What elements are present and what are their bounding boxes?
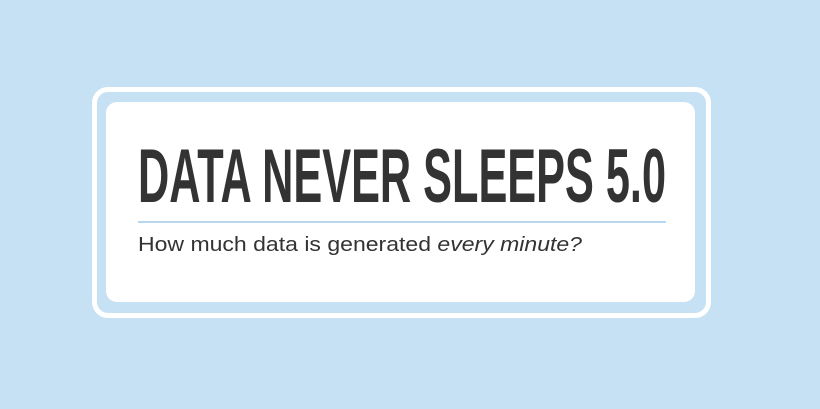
panel: title card xyxy=(106,102,695,302)
subtitle: How much data is generated every minute? xyxy=(138,234,582,256)
title: DATA NEVER SLEEPS 5.0 xyxy=(138,134,666,219)
panel: outer frame xyxy=(92,87,711,318)
